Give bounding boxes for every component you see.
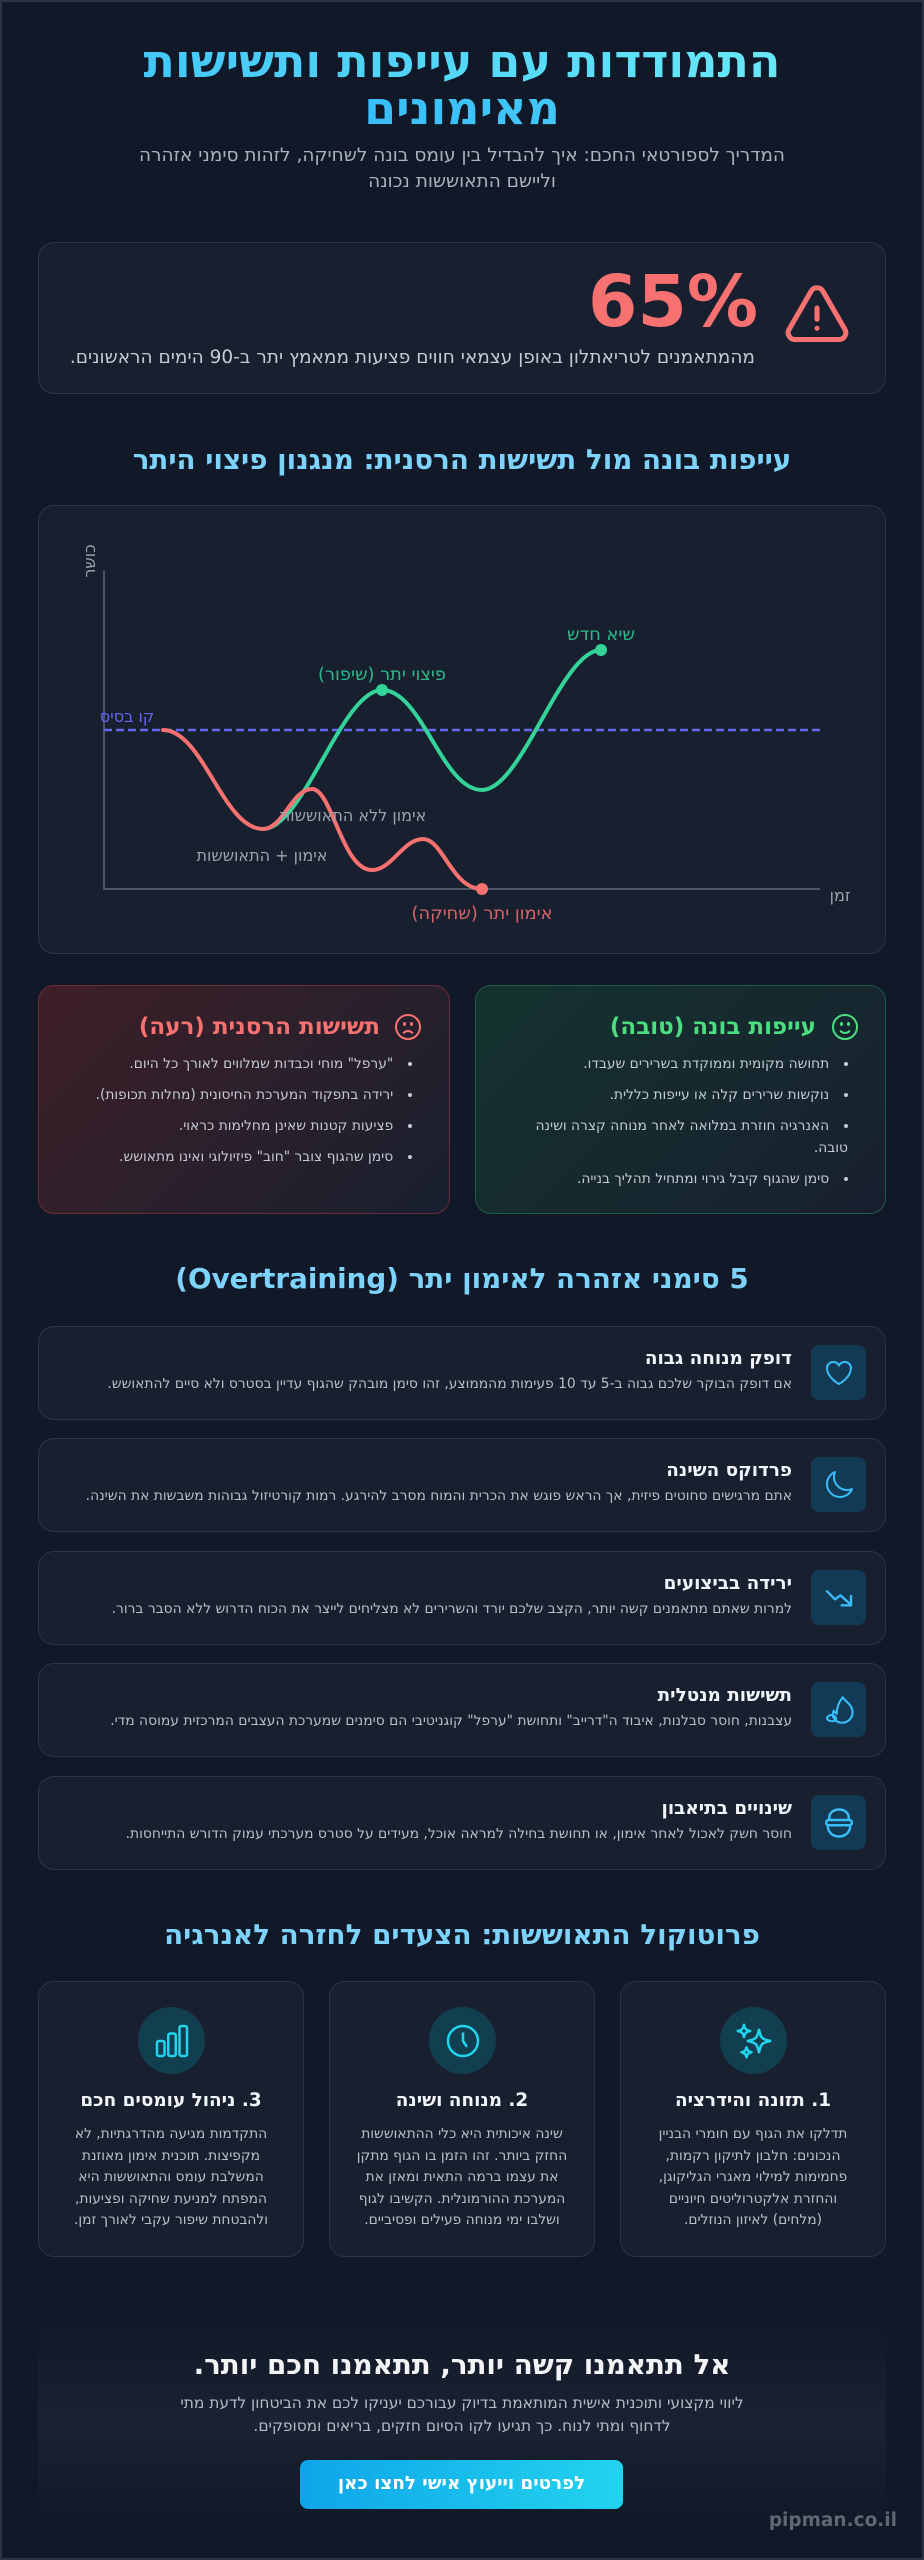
heading: recovery protocol: פרוטוקול התאוששות: הצעדים לחזרה לאנרגיה <box>164 1918 760 1951</box>
statistic description: מהמתאמנים לטריאתלון באופן עצמאי חווים פציעות ממאמץ יתר ב-90 הימים הראשונים. <box>70 347 755 368</box>
card: step 3 load <box>38 1981 304 2257</box>
list: good fatigue: סימן שהגוף קיבל גירוי ומתחיל תהליך בנייה. <box>577 1171 829 1187</box>
step title: 3. ניהול עומסים חכם <box>80 2090 262 2111</box>
markers <box>376 644 607 895</box>
subtitle: המדריך לספורטאי החכם: איך להבדיל בין עומס בונה לשחיקה, לזהות סימני אזהרה <box>139 145 785 166</box>
step text <box>357 2126 567 2228</box>
list: destructive exhaustion <box>96 1056 412 1165</box>
list: destructive exhaustion: סימן שהגוף צובר "חוב" פיזיולוגי ואינו מתאושש. <box>119 1149 393 1165</box>
icon: warning triangle <box>786 285 848 342</box>
card: sleep paradox <box>38 1438 886 1532</box>
subtitle <box>139 145 785 192</box>
label: overtraining: אימון יתר (שחיקה) <box>412 903 552 924</box>
card text: עצבנות, חוסר סבלנות, איבוד ה"דרייב" ותחושת "ערפל" קוגניטיבי הם סימנים שמערכת העצבים המרכזית עמוסה מדי. <box>110 1713 792 1729</box>
step text: את עצמו ברמה התאית ומאזן את <box>366 2169 558 2185</box>
watermark: pipman.co.il <box>769 2510 897 2531</box>
list: destructive exhaustion: "ערפל" מוחי וכבדות שמלווים לאורך כל היום. <box>129 1056 393 1072</box>
card title: ירידה בביצועים <box>664 1573 792 1594</box>
call to action text: ליווי מקצועי ותוכנית אישית המותאמת בדיוק עבורכם יעניקו לכם את הביטחון לדעת מתי <box>180 2394 744 2412</box>
card text: למרות שאתם מתאמנים קשה יותר, הקצב שלכם יורד והשרירים לא מצליחים לייצר את הכוח הדרוש ללא הסבר ברור. <box>112 1601 792 1617</box>
step text <box>74 2126 268 2228</box>
card title: תשישות מנטלית <box>658 1685 792 1706</box>
list: good fatigue <box>535 1056 848 1187</box>
title <box>143 34 781 135</box>
step text: תדלקו את הגוף עם חומרי הבניין <box>659 2126 847 2142</box>
icon: bars <box>138 2007 205 2074</box>
statistic value: 65% <box>588 260 758 343</box>
icon: clock <box>429 2007 496 2074</box>
step text: המפתח למניעת שחיקה ופציעות, <box>75 2191 267 2207</box>
panel: destructive exhaustion <box>38 985 450 1214</box>
card: high resting pulse <box>38 1326 886 1420</box>
card text: חוסר חשק לאכול לאחר אימון, או תחושת בחילה למראה אוכל, מעידים על סטרס מערכתי עמוק הדורש התייחסות. <box>126 1826 792 1842</box>
list: good fatigue: האנרגיה חוזרת במלואה לאחר מנוחה קצרה ושינה טובה. <box>535 1118 848 1156</box>
step text: מקפיצות. תוכנית אימון מאוזנת <box>82 2148 260 2164</box>
subtitle: וליישם התאוששות נכונה <box>368 170 556 192</box>
heading: warning signs: 5 סימני אזהרה לאימון יתר (Overtraining) <box>175 1262 749 1295</box>
step text: ולהבטחת שיפור עקבי לאורך זמן. <box>74 2212 268 2228</box>
card: appetite changes <box>38 1776 886 1870</box>
step text: והחזרת אלקטרוליטים חיוניים <box>669 2191 837 2207</box>
step text: התקדמות מגיעה מהדרגתיות, לא <box>75 2126 267 2142</box>
title: מאימונים <box>364 81 560 135</box>
heading: supercompensation: עייפות בונה מול תשישות הרסנית: מנגנון פיצוי היתר <box>133 443 791 476</box>
panel: chart <box>38 505 886 954</box>
step title: 2. מנוחה ושינה <box>396 2090 528 2111</box>
label: no recovery: אימון ללא התאוששות <box>280 806 426 825</box>
panel: good fatigue <box>475 985 886 1214</box>
card: step 2 rest <box>329 1981 595 2257</box>
label: new peak: שיא חדש <box>567 624 635 645</box>
icon: smile <box>832 1014 858 1040</box>
heading: destructive exhaustion: תשישות הרסנית (רעה) <box>139 1014 380 1040</box>
call to action text <box>180 2394 744 2435</box>
icon: flame <box>811 1682 866 1737</box>
list: destructive exhaustion: ירידה בתפקוד המערכת החיסונית (מחלות תכופות). <box>96 1087 393 1103</box>
icon: moon <box>811 1457 866 1512</box>
step text: (מלחים) לאיזון הנוזלים. <box>684 2212 822 2228</box>
heading: good fatigue: עייפות בונה (טובה) <box>610 1014 816 1040</box>
label: baseline: קו בסיס <box>100 707 154 726</box>
card: step 1 nutrition <box>620 1981 886 2257</box>
card text: אתם מרגישים סחוטים פיזית, אך הראש פוגש את הכרית והמוח מסרב להירגע. רמות קורטיזול גבוהות משבשות את השינה. <box>86 1488 792 1504</box>
list: good fatigue: נוקשות שרירים קלה או עייפות כללית. <box>610 1087 829 1103</box>
list: good fatigue: תחושה מקומית וממוקדת בשרירים שעבדו. <box>583 1056 829 1072</box>
button <box>300 2460 623 2509</box>
title: התמודדות עם עייפות ותשישות <box>143 34 781 88</box>
step text <box>659 2126 847 2228</box>
label: y axis: כושר <box>80 544 99 578</box>
step text: המערכת ההורמונלית. הקשיבו לגוף <box>359 2191 565 2207</box>
icon: heart <box>811 1345 866 1400</box>
baseline <box>104 729 820 731</box>
icon: sparkles <box>720 2007 787 2074</box>
card text: אם דופק הבוקר שלכם גבוה ב-5 עד 10 פעימות מהממוצע, זהו סימן מובהק שהגוף עדיין בסטרס ולא סיים להתאושש. <box>107 1376 792 1392</box>
call to action text: לדחוף ומתי לנוח. כך תגיעו לקו הסיום חזקים, בריאים ומסופקים. <box>253 2417 671 2435</box>
panel: call to action <box>38 2323 886 2523</box>
red curve: training without recovery <box>163 730 482 889</box>
label: overcompensation: פיצוי יתר (שיפור) <box>318 664 446 685</box>
step text: ושלבו ימי מנוחה פעילים ופסיביים. <box>364 2212 560 2228</box>
icon: sad face <box>395 1014 421 1040</box>
step text: שינה איכותית היא כלי ההתאוששות <box>361 2126 563 2142</box>
card: mental exhaustion <box>38 1663 886 1757</box>
call to action heading: אל תתאמנו קשה יותר, תתאמנו חכם יותר. <box>194 2348 730 2381</box>
axes <box>104 570 820 889</box>
step title: 1. תזונה והידרציה <box>675 2090 831 2111</box>
step text: המשלבת עומס והתאוששות היא <box>78 2169 264 2185</box>
line chart: supercompensation curves <box>80 544 850 924</box>
label: x axis: זמן <box>830 886 850 905</box>
panel: key statistic <box>38 242 886 394</box>
icon: trending down <box>811 1570 866 1625</box>
card title: דופק מנוחה גבוה <box>645 1348 792 1369</box>
label: with recovery: אימון + התאוששות <box>196 846 328 865</box>
step text: פחמימות למילוי מאגרי הגליקוגן, <box>659 2169 847 2185</box>
card title: פרדוקס השינה <box>666 1460 792 1481</box>
step text: הנכונים: חלבון לתיקון רקמות, <box>666 2148 840 2164</box>
card: performance drop <box>38 1551 886 1645</box>
step text: החזק ביותר. זהו הזמן בו הגוף מתקן <box>357 2148 567 2164</box>
card title: שינויים בתיאבון <box>662 1798 792 1819</box>
button: לפרטים וייעוץ אישי לחצו כאן <box>338 2473 585 2494</box>
list: destructive exhaustion: פציעות קטנות שאינן מחלימות כראוי. <box>179 1118 393 1134</box>
icon: bowl <box>811 1795 866 1850</box>
green curve: training plus recovery <box>263 650 601 829</box>
